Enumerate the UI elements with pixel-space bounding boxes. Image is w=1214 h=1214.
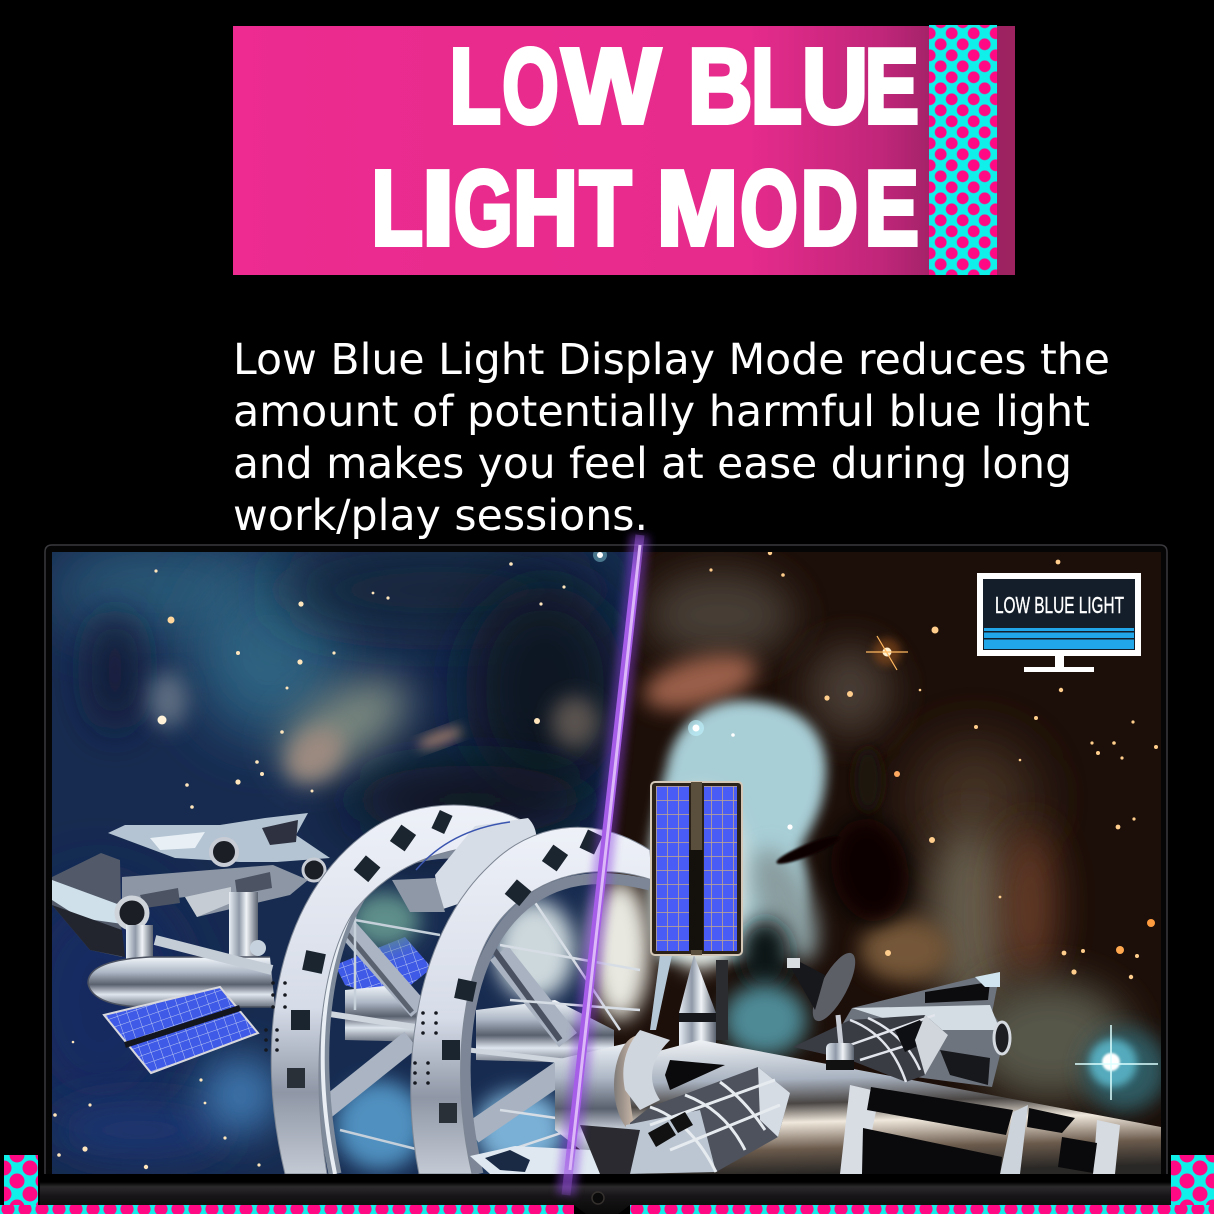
monitor <box>10 535 1171 1214</box>
curved base <box>88 957 275 1007</box>
pale cloud <box>651 701 826 960</box>
title: E <box>865 150 919 268</box>
vertical solar mast <box>650 955 728 1047</box>
wheel windows <box>439 830 602 1123</box>
deck <box>122 865 308 917</box>
left half: blue nebula <box>10 545 652 1174</box>
supports <box>229 892 258 956</box>
front wheel inner tube <box>465 878 650 1174</box>
title: E <box>865 28 919 146</box>
title: T <box>580 150 631 268</box>
title: U <box>802 28 868 146</box>
main tube <box>625 1040 1161 1174</box>
title: L <box>751 28 802 146</box>
upper right ship <box>830 972 1010 1087</box>
screen <box>10 545 1170 1174</box>
space station <box>52 782 1161 1174</box>
stars: left <box>53 548 607 1169</box>
corner pattern blocks <box>0 1155 1214 1214</box>
hub <box>555 1036 636 1150</box>
wheel rim shoulder <box>435 818 536 910</box>
central cones <box>345 986 417 1042</box>
left solar panel <box>104 987 258 1073</box>
title: H <box>513 150 578 268</box>
vertical solar panel <box>651 782 742 955</box>
title: B <box>688 28 752 146</box>
pale interior behind wheels <box>350 892 420 948</box>
title <box>371 28 919 268</box>
title: G <box>454 150 513 268</box>
rear wheel <box>264 805 536 1174</box>
rear ship <box>108 813 330 862</box>
wheel windows <box>287 810 453 1088</box>
webcam ring <box>592 1192 604 1204</box>
rear wheel inner tube <box>323 852 470 1174</box>
low blue light monitor icon <box>977 573 1141 672</box>
title: L <box>449 28 501 146</box>
title: L <box>371 150 423 268</box>
lower ship <box>470 1125 640 1174</box>
icon label: LOW BLUE LIGHT <box>995 592 1124 618</box>
bottom bezel <box>40 1174 1171 1214</box>
front wheel <box>411 827 652 1174</box>
description text: work/play sessions. <box>233 491 648 541</box>
title: I <box>422 150 455 268</box>
title: W <box>562 28 660 146</box>
title banner <box>233 25 1015 275</box>
description text: Low Blue Light Display Mode reduces the <box>233 335 1110 385</box>
left ship platform <box>52 813 330 1007</box>
polka dot strip <box>929 25 997 275</box>
ship cage <box>793 1015 948 1082</box>
monitor frame <box>45 545 1167 1178</box>
description text: and makes you feel at ease during long <box>233 439 1072 489</box>
satellite dish <box>787 947 863 1070</box>
icon blue stripes <box>984 628 1134 649</box>
caged tube <box>625 1067 790 1174</box>
wheel rivets <box>264 981 287 1052</box>
purple divider beam <box>566 535 640 1195</box>
banner background <box>233 26 1015 275</box>
description text: amount of potentially harmful blue light <box>233 387 1090 437</box>
front wheel band <box>411 827 652 1174</box>
stars: right <box>688 551 1158 979</box>
collar <box>623 1030 670 1110</box>
title: D <box>801 150 858 268</box>
wheel spokes <box>330 893 640 1150</box>
title: M <box>657 150 738 268</box>
rear wheel band <box>271 805 530 1174</box>
back solar panel <box>338 937 429 989</box>
description text <box>233 335 1110 541</box>
right half: warm nebula <box>570 551 1170 1174</box>
bright blue star <box>1075 1025 1158 1100</box>
front ship <box>52 853 122 957</box>
dark dust <box>858 760 877 805</box>
title: O <box>502 28 559 146</box>
tube panels <box>665 1060 1097 1174</box>
title: O <box>740 150 798 268</box>
